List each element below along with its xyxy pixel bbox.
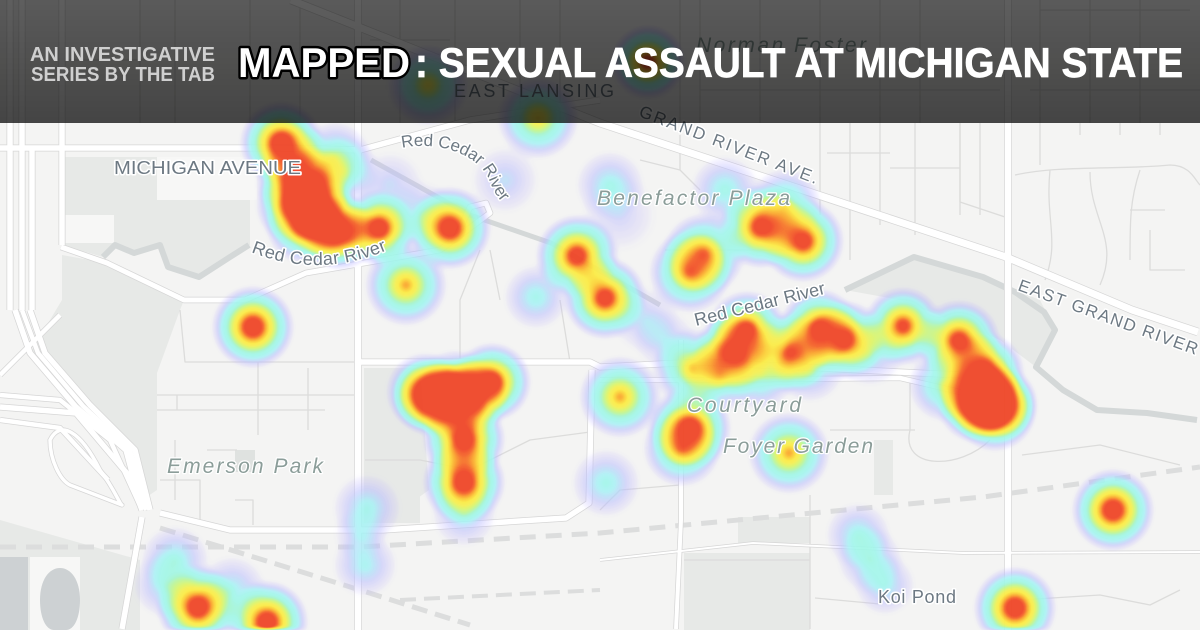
map: white lots xyxy=(30,157,257,630)
series tagline xyxy=(30,44,215,86)
map label: Red Cedar River (north curve): Red Cedar River xyxy=(400,132,510,202)
header overlay xyxy=(0,0,1200,123)
map label: East Grand River: EAST GRAND RIVER xyxy=(1016,276,1200,359)
map: rivers xyxy=(103,160,1197,420)
map label: Foyer Garden: Foyer Garden xyxy=(723,435,873,458)
header band xyxy=(0,0,1200,123)
map label: East Lansing: EAST LANSING xyxy=(454,81,614,101)
map label: Red Cedar River (east): Red Cedar River xyxy=(692,278,827,330)
map label: Koi Pond: Koi Pond xyxy=(878,587,956,607)
map label: Red Cedar River (lower curve): Red Cedar River xyxy=(251,240,386,266)
map label: Emerson Park: Emerson Park xyxy=(167,455,324,478)
map: railway lines xyxy=(0,467,1200,625)
map: park and building areas xyxy=(0,157,1055,630)
map label: Benefactor Plaza: Benefactor Plaza xyxy=(597,187,790,210)
series tagline: SERIES BY THE TAB xyxy=(31,64,215,86)
map: stadium shapes xyxy=(0,557,80,630)
map label: Michigan Avenue: MICHIGAN AVENUE xyxy=(114,158,301,178)
title: MAPPED xyxy=(238,39,410,86)
map label: Grand River Ave: GRAND RIVER AVE. xyxy=(637,102,821,188)
map label: Norman Foster Park: Norman Foster xyxy=(696,34,867,57)
series tagline: AN INVESTIGATIVE xyxy=(30,44,215,66)
map label: Courtyard: Courtyard xyxy=(687,394,802,417)
